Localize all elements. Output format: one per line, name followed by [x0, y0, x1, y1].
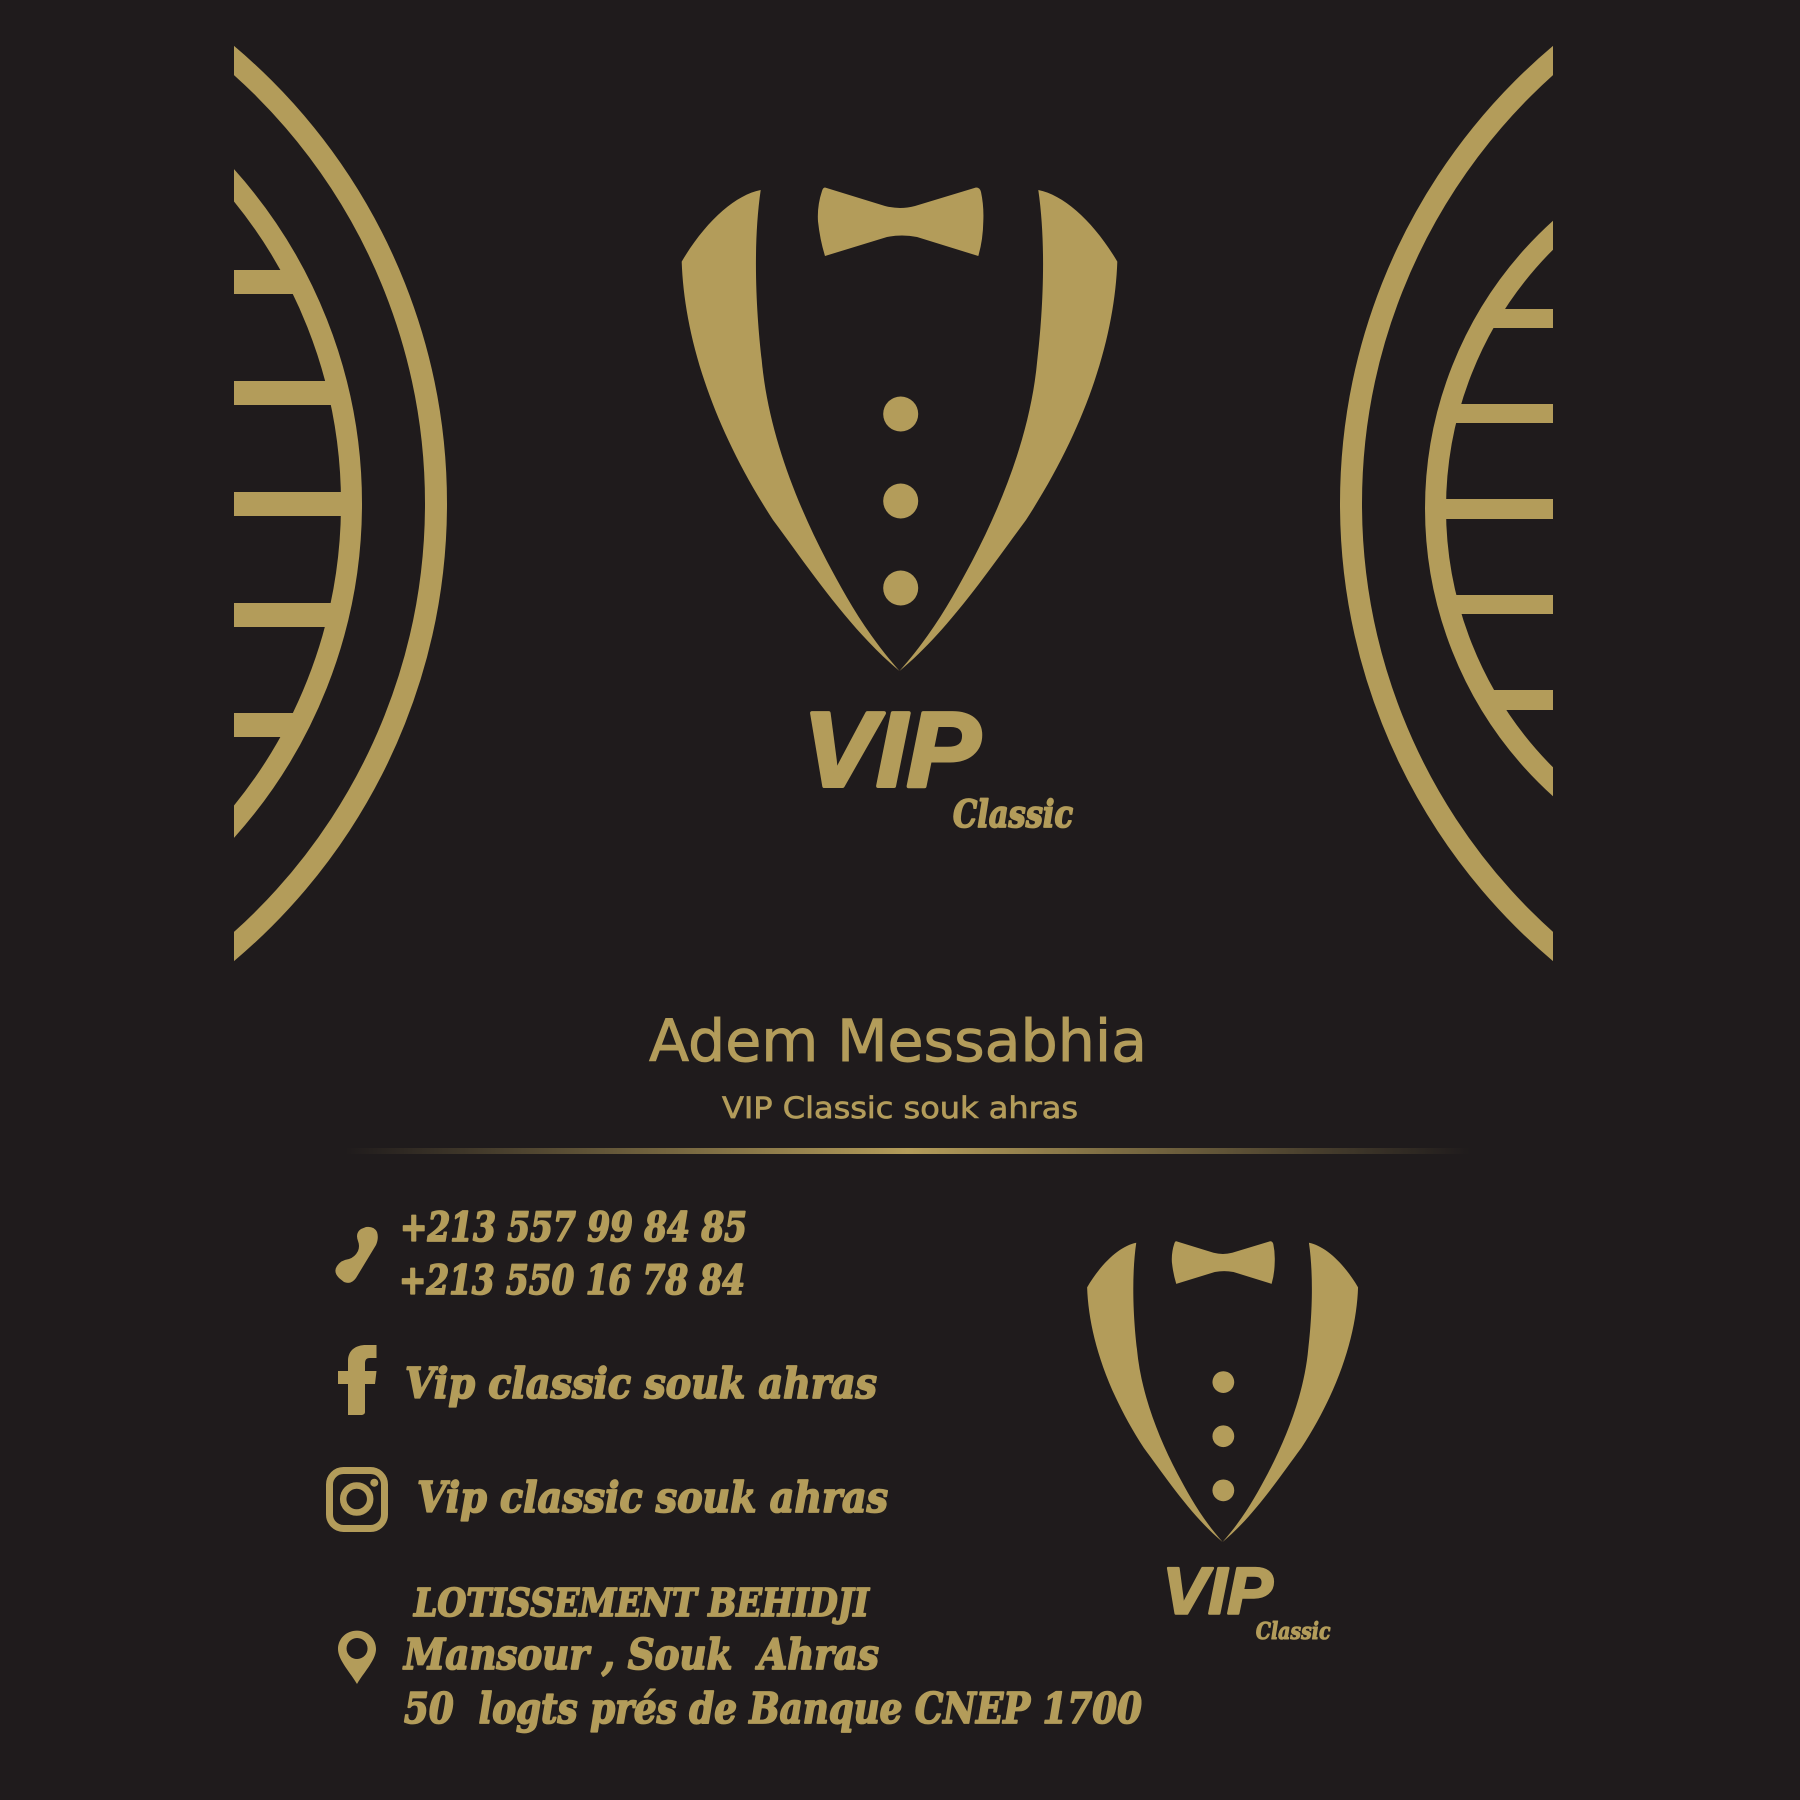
right lapel: [900, 190, 1117, 671]
phone numbers: [399, 1204, 747, 1304]
small wordmark VIP: VIP: [1163, 1553, 1274, 1627]
main logo: tuxedo emblem: [682, 188, 1117, 836]
icon: facebook: [338, 1345, 376, 1415]
bow tie: [818, 188, 983, 256]
address: Mansour , Souk Ahras: [402, 1630, 879, 1679]
address: 50 logts prés de Banque CNEP 1700: [404, 1684, 1142, 1733]
small left lapel: [1087, 1243, 1223, 1542]
small bow tie: [1172, 1241, 1275, 1284]
subtitle: VIP Classic souk ahras: [722, 1091, 1078, 1125]
name heading: Adem Messabhia: [649, 1007, 1147, 1075]
address: LOTISSEMENT BEHIDJI: [413, 1580, 870, 1625]
right arc decoration: [1340, 46, 1553, 961]
small logo: [1087, 1241, 1358, 1645]
icon: phone: [335, 1227, 378, 1283]
left arc decoration: [234, 46, 447, 961]
phone numbers: +213 550 16 78 84: [399, 1257, 745, 1304]
small buttons: [1212, 1371, 1234, 1501]
instagram label: Vip classic souk ahras: [417, 1473, 888, 1522]
icon: instagram: [330, 1470, 384, 1528]
shirt buttons: [883, 396, 918, 606]
left lapel: [682, 190, 900, 671]
facebook label: Vip classic souk ahras: [405, 1359, 877, 1408]
phone numbers: +213 557 99 84 85: [400, 1204, 747, 1251]
logo wordmark VIP: VIP: [803, 691, 980, 809]
logo sub-wordmark Classic: Classic: [953, 792, 1073, 836]
small right lapel: [1223, 1243, 1358, 1542]
divider: [345, 1148, 1470, 1154]
small sub-wordmark Classic: Classic: [1256, 1618, 1331, 1645]
address: [402, 1580, 1142, 1733]
icon: location pin: [338, 1631, 376, 1684]
